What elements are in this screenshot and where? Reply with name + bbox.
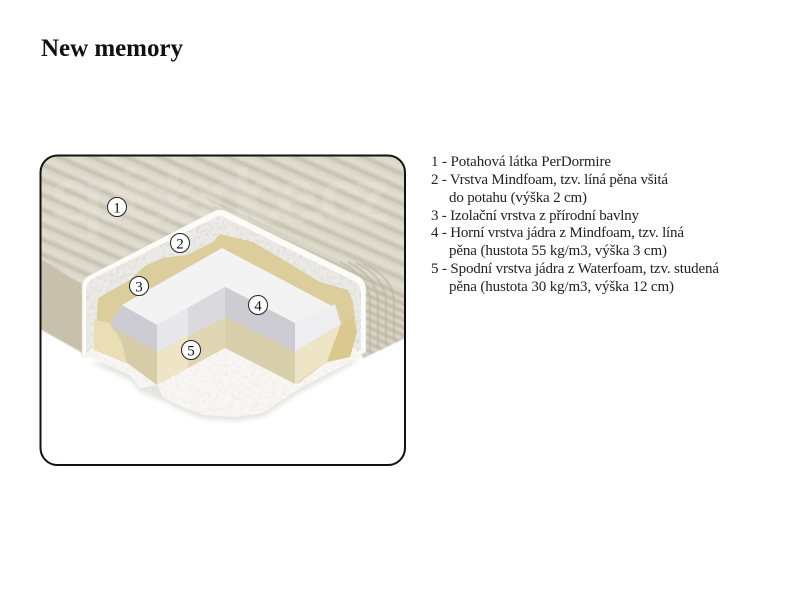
right wing, inner upper bbox=[225, 287, 295, 352]
left wing, front upper bbox=[157, 287, 225, 352]
mattress side ribs, right bbox=[340, 262, 394, 352]
marker 1 bbox=[108, 198, 126, 216]
marker 2: 2 bbox=[176, 236, 184, 252]
marker 3: 3 bbox=[135, 280, 143, 296]
mattress top fabric bbox=[40, 150, 405, 358]
legend text: 4 - Horní vrstva jádra z Mindfoam, tzv. líná bbox=[431, 225, 684, 241]
marker 3 bbox=[130, 276, 148, 296]
marker 4 bbox=[248, 296, 268, 314]
outer white cover edge bbox=[82, 210, 366, 358]
legend text: do potahu (výška 2 cm) bbox=[449, 190, 587, 206]
core top face bbox=[110, 248, 340, 325]
legend text: 5 - Spodní vrstva jádra z Waterfoam, tzv. studená bbox=[431, 261, 719, 277]
legend text: pěna (hustota 30 kg/m3, výška 12 cm) bbox=[449, 279, 674, 295]
right wing, front lower bbox=[295, 324, 341, 384]
legend text: 1 - Potahová látka PerDormire bbox=[431, 154, 611, 170]
fluffy base on floor bbox=[84, 347, 361, 417]
fluffy Mindfoam layer bbox=[86, 216, 361, 358]
core block bbox=[110, 248, 341, 385]
base shadow bbox=[90, 360, 360, 421]
watermark: spisladce.cz bbox=[50, 154, 390, 239]
right wing, inner lower bbox=[225, 317, 295, 384]
marker 5 bbox=[182, 340, 200, 360]
left wing, front lower bbox=[157, 336, 225, 385]
left wing, front upper shaded bbox=[188, 287, 225, 336]
legend text: 2 - Vrstva Mindfoam, tzv. líná pěna všitá bbox=[431, 172, 668, 188]
title: New memory bbox=[41, 35, 184, 62]
marker 1: 1 bbox=[113, 200, 121, 216]
mattress side fabric, left bbox=[40, 258, 84, 354]
lower right insulation wedge bbox=[327, 316, 356, 362]
legend text bbox=[431, 154, 719, 295]
marker 4: 4 bbox=[254, 298, 262, 314]
left wing, left side upper bbox=[110, 305, 157, 352]
legend text: pěna (hustota 55 kg/m3, výška 3 cm) bbox=[449, 243, 667, 259]
marker 5: 5 bbox=[187, 344, 195, 360]
marker 2 bbox=[170, 234, 190, 252]
right wing, front upper bbox=[295, 304, 341, 352]
panel: mattress cutaway illustration bbox=[40, 150, 405, 465]
cotton insulation layer bbox=[94, 234, 357, 384]
legend text: 3 - Izolační vrstva z přírodní bavlny bbox=[431, 208, 640, 224]
lower left insulation wedge bbox=[94, 320, 126, 362]
panel border bbox=[40, 156, 405, 465]
left wing, front lower shaded bbox=[188, 317, 225, 368]
left wing, left side lower bbox=[110, 325, 157, 385]
